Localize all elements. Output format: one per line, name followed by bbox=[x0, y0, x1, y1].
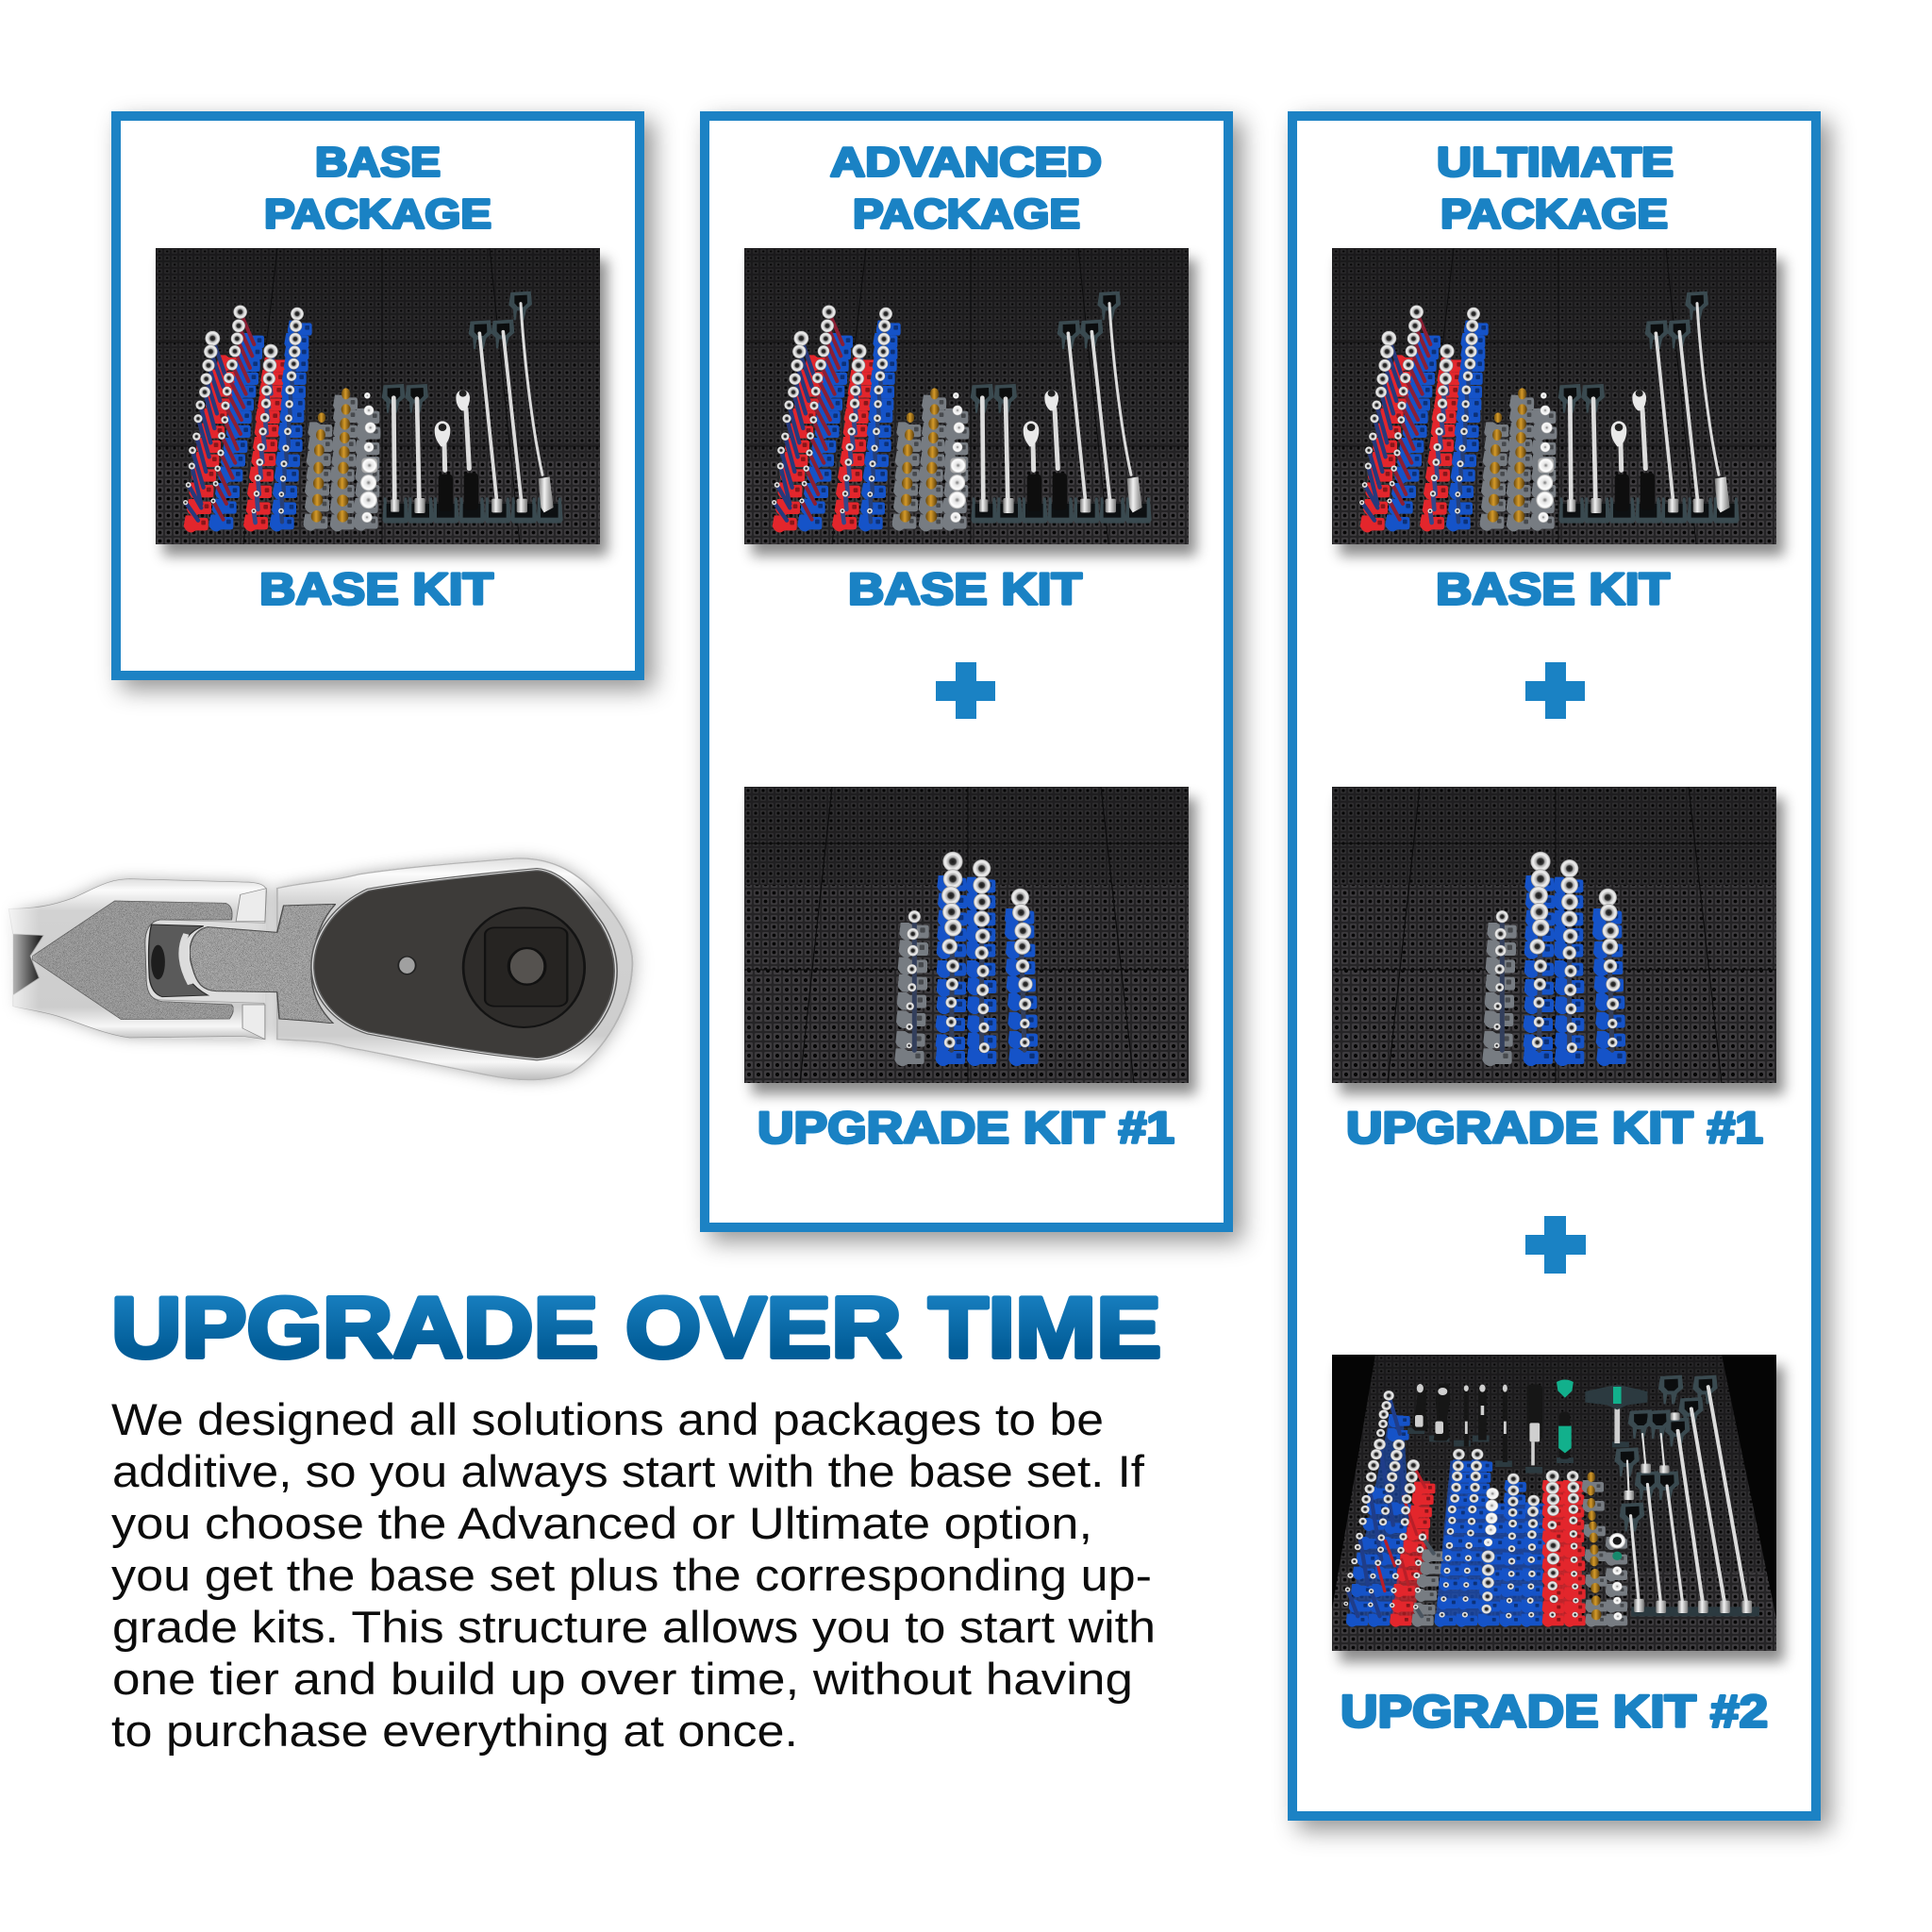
panel: base package bbox=[116, 116, 640, 675]
heading: ultimate package: ULTIMATE bbox=[1437, 140, 1674, 185]
heading: advanced package bbox=[830, 140, 1102, 238]
label: base kit: BASE KIT bbox=[1436, 564, 1670, 613]
heading: base package: PACKAGE bbox=[264, 191, 491, 238]
photo: base kit bbox=[744, 248, 1189, 544]
heading: advanced package: ADVANCED bbox=[830, 140, 1102, 185]
text block: description: grade kits. This structure allows you to start with bbox=[112, 1602, 1156, 1652]
text block: description: you choose the Advanced or Ultimate option, bbox=[111, 1498, 1092, 1548]
title: UPGRADE OVER TIME bbox=[111, 1281, 1161, 1375]
icon: plus bbox=[936, 662, 995, 719]
text block: description: to purchase everything at once. bbox=[111, 1706, 798, 1756]
text block: description bbox=[111, 1394, 1156, 1756]
photo: base kit bbox=[1332, 248, 1776, 544]
label: base kit: BASE KIT bbox=[259, 564, 493, 613]
heading: base package: BASE bbox=[315, 140, 441, 185]
text block: description: you get the base set plus the corresponding up- bbox=[111, 1550, 1152, 1600]
icon: plus bbox=[1525, 1216, 1586, 1274]
icon: plus bbox=[1525, 662, 1585, 719]
label: upgrade kit 1: UPGRADE KIT #1 bbox=[758, 1102, 1174, 1153]
heading: ultimate package bbox=[1437, 140, 1674, 238]
text block: description: We designed all solutions and packages to be bbox=[111, 1394, 1104, 1444]
photo: flex-head ratchet bbox=[0, 858, 632, 1080]
text block: description: one tier and build up over time, without having bbox=[112, 1654, 1133, 1704]
photo: upgrade kit 1 bbox=[744, 787, 1189, 1083]
panel: advanced package bbox=[705, 116, 1228, 1227]
panel: ultimate package bbox=[1292, 116, 1816, 1816]
label: base kit: BASE KIT bbox=[848, 564, 1082, 613]
heading: advanced package: PACKAGE bbox=[853, 191, 1080, 238]
photo: upgrade kit 1 bbox=[1332, 787, 1776, 1083]
label: upgrade kit 1: UPGRADE KIT #1 bbox=[1346, 1102, 1763, 1153]
photo: upgrade kit 2 bbox=[1332, 1355, 1776, 1651]
label: upgrade kit 2: UPGRADE KIT #2 bbox=[1341, 1687, 1768, 1738]
heading: base package bbox=[264, 140, 491, 238]
heading: ultimate package: PACKAGE bbox=[1441, 191, 1668, 238]
text block: description: additive, so you always start with the base set. If bbox=[112, 1446, 1145, 1496]
photo: base kit bbox=[156, 248, 600, 544]
